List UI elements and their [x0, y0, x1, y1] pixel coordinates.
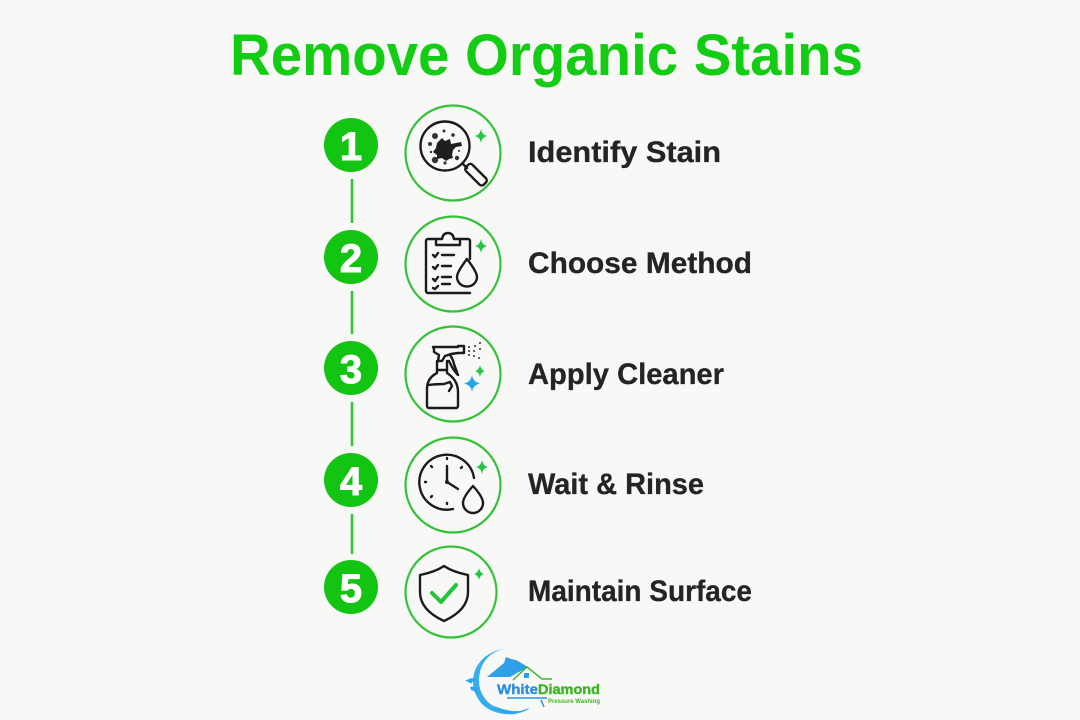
number badge 3: 3 — [340, 348, 362, 392]
step 5: maintain surface — [324, 546, 752, 638]
number badge 3 — [324, 341, 378, 395]
logo: White Diamond Pressure Washing — [465, 648, 600, 714]
logo wand — [507, 698, 547, 707]
icon: sparkle — [474, 568, 484, 580]
icon: clock with drop — [419, 455, 483, 513]
icon: magnifier with stain — [420, 122, 488, 187]
step 4: wait and rinse — [324, 438, 704, 532]
number badge 5: 5 — [340, 567, 362, 611]
number badge 4: 4 — [340, 460, 363, 504]
icon ring 2 — [406, 216, 500, 312]
number badge 2 — [324, 230, 378, 284]
icon: sparkle — [475, 239, 487, 253]
number badge 1 — [324, 118, 378, 172]
logo window — [524, 673, 529, 678]
logo: White Diamond Pressure Washing: Diamond — [538, 681, 600, 697]
icon: sparkle — [476, 460, 488, 474]
number badge 4 — [324, 453, 378, 507]
icon: green sparkle — [475, 365, 485, 377]
icon ring 1 — [406, 106, 500, 200]
icon ring 5 — [406, 546, 496, 638]
icon: shield with check — [420, 566, 468, 621]
label: Choose Method — [528, 247, 752, 280]
title: Remove Organic Stains — [230, 23, 863, 88]
icon ring 4 — [406, 438, 500, 532]
icon: sparkle — [475, 129, 487, 143]
number badge 2: 2 — [340, 237, 362, 281]
label: Identify Stain — [528, 136, 721, 169]
step 2: choose method — [324, 216, 752, 312]
logo roof — [487, 657, 528, 677]
number badge 5 — [324, 560, 378, 614]
logo wordmark: White — [497, 681, 538, 697]
icon ring 3 — [406, 326, 500, 422]
label: Wait & Rinse — [528, 468, 704, 501]
step 1: identify stain — [324, 106, 721, 200]
label: Maintain Surface — [528, 575, 752, 608]
icon: spray bottle — [427, 342, 481, 408]
logo green roof line — [513, 667, 552, 680]
logo water swoosh — [473, 648, 517, 714]
logo tagline: Pressure Washing — [548, 698, 600, 705]
logo bottom swoosh — [494, 706, 530, 714]
number badge 1: 1 — [340, 125, 362, 169]
icon: blue sparkle — [464, 375, 480, 392]
icon: clipboard with drop — [426, 233, 477, 293]
label: Apply Cleaner — [528, 358, 724, 391]
timeline connector — [351, 179, 353, 554]
step 3: apply cleaner — [324, 326, 724, 422]
